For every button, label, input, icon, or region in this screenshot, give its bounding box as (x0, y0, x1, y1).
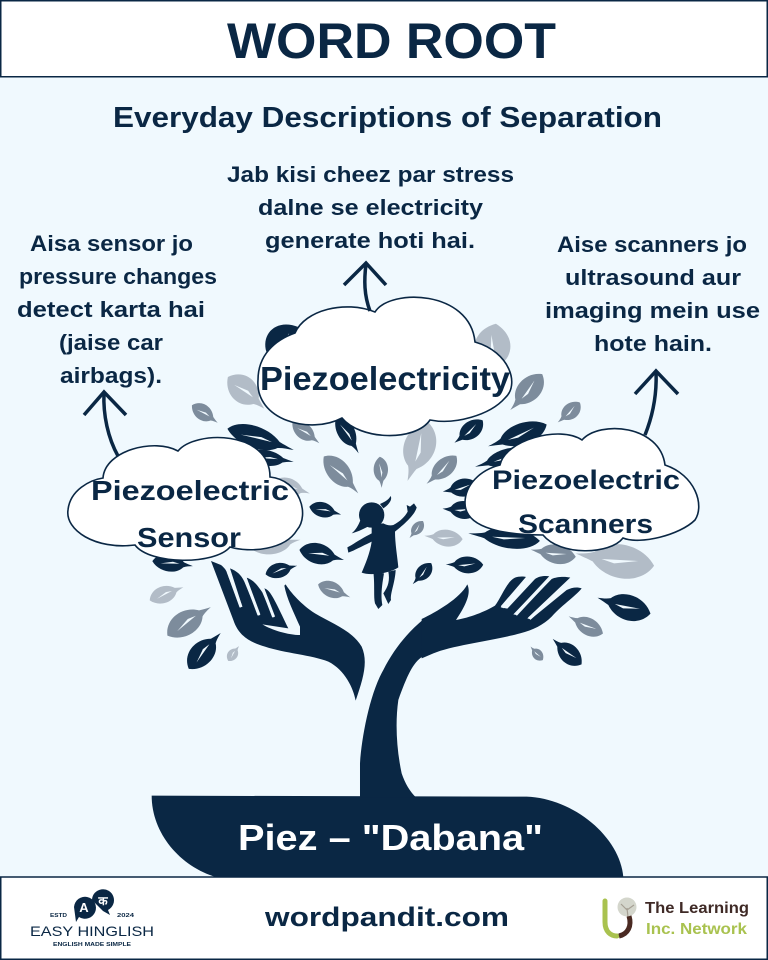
logo: Easy Hinglish: ENGLISH MADE SIMPLE (53, 942, 131, 948)
definition: left: pressure changes (19, 264, 217, 289)
logo: Easy Hinglish: क (97, 894, 108, 908)
arrow: center cloud to definition (344, 263, 386, 311)
child silhouette (347, 496, 417, 609)
definition: right (545, 232, 760, 356)
logo: Easy Hinglish: EASY HINGLISH (30, 923, 154, 939)
definition: left: detect karta hai (17, 297, 205, 322)
definition: center: dalne se electricity (258, 195, 484, 220)
logo: The Learning Inc. Network: The Learning (645, 900, 749, 917)
root word label: Piez – "Dabana" (238, 817, 543, 858)
cloud: Piezoelectric Scanners (465, 429, 699, 551)
right hand (422, 575, 582, 658)
logo: Easy Hinglish: 2024 (117, 913, 134, 919)
logo: Easy Hinglish (30, 889, 154, 948)
definition: left: airbags). (60, 363, 162, 388)
tree canopy leaves (147, 315, 657, 676)
footer bar (1, 877, 767, 959)
definition: right: imaging mein use (545, 298, 760, 323)
definition: right: ultrasound aur (565, 265, 741, 290)
cloud: Piezoelectric Sensor: Piezoelectric (91, 475, 289, 506)
trunk (360, 619, 430, 797)
logo: Easy Hinglish: ESTD (50, 913, 67, 919)
website: wordpandit.com (264, 902, 509, 932)
logo: The Learning Inc. Network: Inc. Network (646, 921, 747, 938)
ground mound (152, 796, 623, 877)
arrow: right cloud to definition (635, 371, 678, 435)
subtitle: Everyday Descriptions of Separation (113, 102, 662, 134)
definition: right: hote hain. (594, 331, 712, 356)
definition: right: Aise scanners jo (557, 232, 747, 257)
cloud: Piezoelectric Sensor (68, 438, 303, 560)
cloud: Piezoelectric Scanners: Scanners (518, 509, 653, 539)
cloud: Piezoelectricity: Piezoelectricity (260, 360, 511, 397)
header banner (1, 1, 767, 77)
cloud: Piezoelectric Scanners: Piezoelectric (492, 465, 680, 495)
definition: left: Aisa sensor jo (30, 231, 193, 256)
definition: left: (jaise car (59, 330, 163, 355)
definition: center: generate hoti hai. (265, 228, 475, 253)
logo: Easy Hinglish: A (79, 900, 89, 915)
trunk and ground (152, 619, 623, 877)
definition: left (17, 231, 217, 388)
title: WORD ROOT (227, 13, 556, 69)
definition: center: Jab kisi cheez par stress (227, 162, 514, 187)
cloud: Piezoelectricity (258, 297, 512, 436)
logo: The Learning Inc. Network (605, 898, 749, 938)
definition: center (227, 162, 514, 253)
left hand (211, 561, 365, 701)
cloud: Piezoelectric Sensor: Sensor (137, 522, 241, 553)
arrow: left cloud to definition (84, 392, 126, 456)
